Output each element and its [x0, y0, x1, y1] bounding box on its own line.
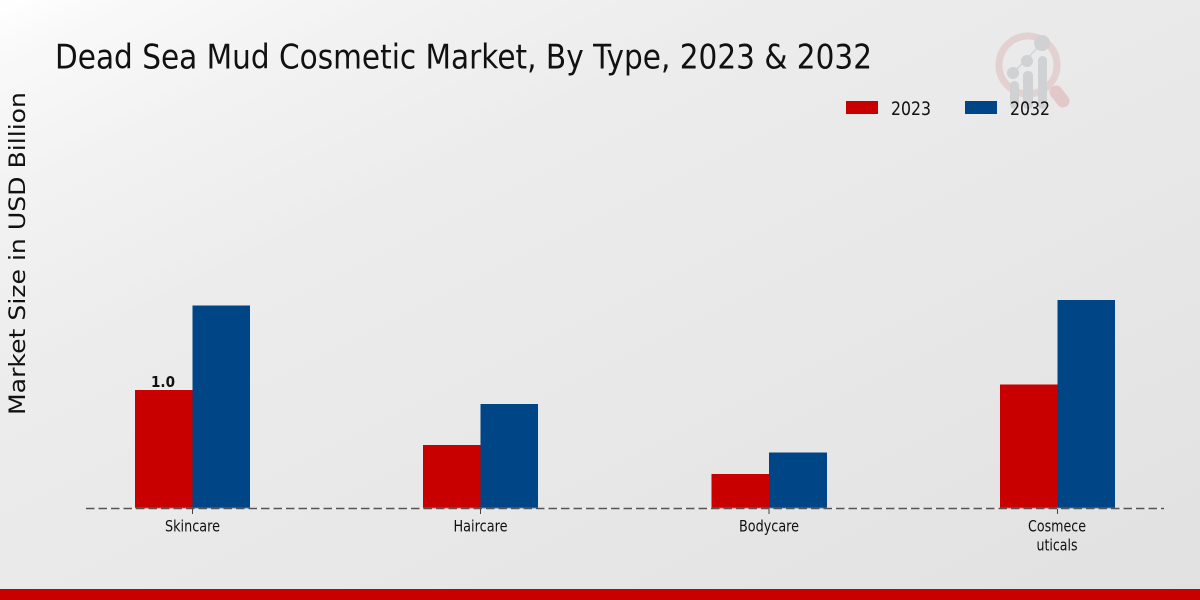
value label: 1.0 — [151, 373, 175, 391]
group: Bodycare — [712, 452, 827, 509]
legend: 2032 — [965, 98, 1050, 120]
y axis label: Market Size in USD Billion — [5, 92, 31, 415]
x label: Cosmeceuticals: uticals — [1036, 536, 1078, 554]
legend: 2023 — [846, 98, 931, 120]
x label: Cosmeceuticals — [1028, 516, 1086, 554]
x label: Cosmeceuticals: Cosmece — [1028, 516, 1086, 536]
legend: 2023: 2023 — [891, 98, 931, 120]
x label: Haircare: Haircare — [454, 516, 508, 536]
axis baseline — [86, 508, 1164, 510]
bar chart — [86, 300, 1164, 514]
group: Haircare — [423, 404, 538, 509]
group: Cosmeceuticals — [1000, 300, 1115, 509]
title: Dead Sea Mud Cosmetic Market, By Type, 2023 & 2032 — [55, 38, 872, 78]
x label: Skincare: Skincare — [165, 516, 220, 536]
footer bar — [0, 589, 1200, 600]
legend: 2032: 2032 — [1010, 98, 1050, 120]
x label: Bodycare: Bodycare — [739, 516, 799, 536]
watermark logo — [999, 35, 1063, 109]
group: Skincare — [135, 306, 250, 509]
legend — [846, 98, 1050, 120]
